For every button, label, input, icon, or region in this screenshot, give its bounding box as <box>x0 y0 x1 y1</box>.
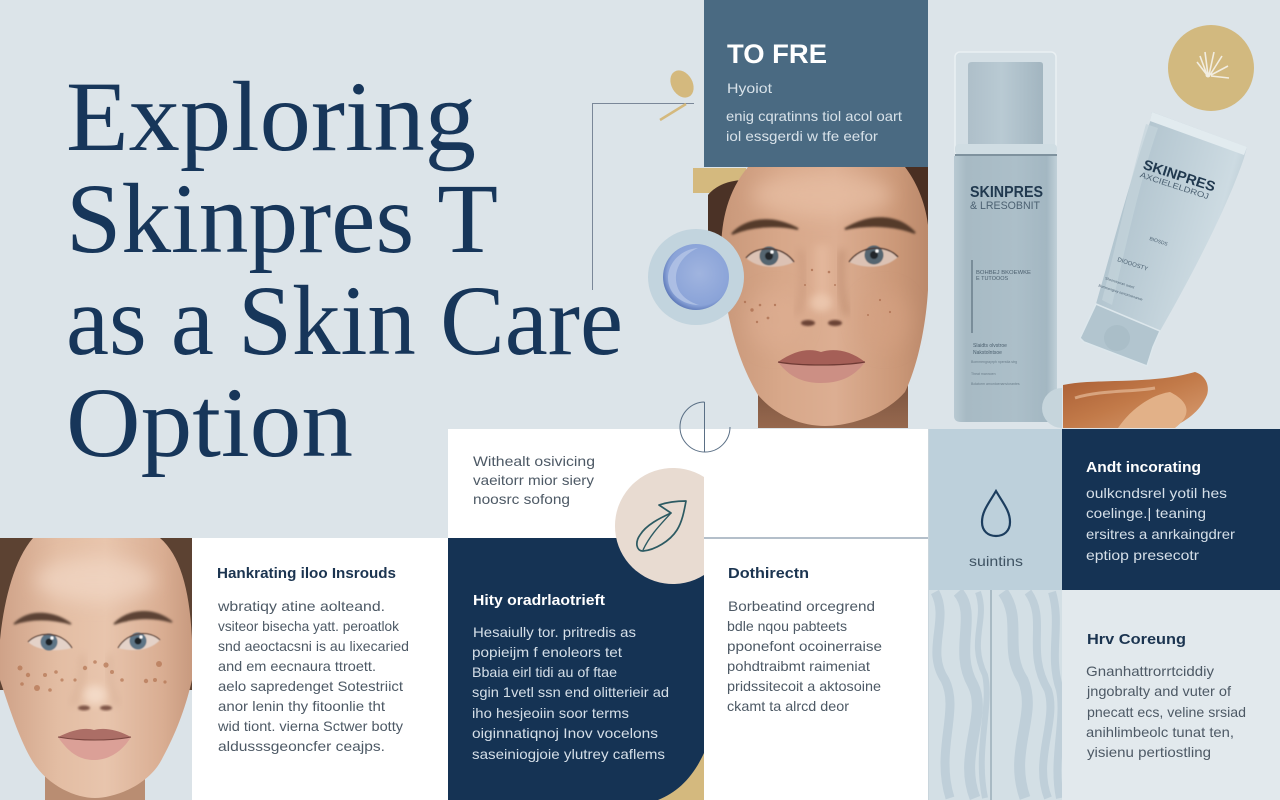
title: Exploring <box>66 61 476 172</box>
gold rectangle accent <box>693 168 746 193</box>
icon: bottle: BOHBEJ BKOEWKE <box>976 270 1031 276</box>
panel: to fre: TO FRE <box>727 39 827 69</box>
panel: navy text right: coelinge.| teaning <box>1086 505 1206 521</box>
panel: navy text right <box>1062 429 1280 590</box>
panel: left text: aelo sapredenget Sotestriict <box>218 678 403 694</box>
panel: navy text: sgin 1vetl ssn end olitterieir ad <box>472 684 669 700</box>
panel: navy text: Hesaiully tor. pritredis as <box>473 624 636 640</box>
panel: navy text: Bbaia eirl tidi au of ftae <box>472 664 617 680</box>
icon: bottle: Bolatorm amontoenanviorantes <box>971 382 1020 386</box>
icon: water drop <box>982 491 1010 536</box>
panel: right text <box>704 539 928 800</box>
panel: right text: Dothirectn <box>728 565 809 582</box>
icon: tube: AXCIELELDROJ <box>1139 170 1210 201</box>
icon: tube: SKINPRES <box>1141 156 1218 194</box>
panel: right text: pridssitecoit a aktosoine <box>727 678 881 694</box>
panel: light text right: yisienu pertiostling <box>1087 744 1211 760</box>
panel: light text right: Gnanhattrorrtciddiy <box>1086 663 1214 679</box>
title: Option <box>66 367 353 478</box>
title <box>66 61 623 478</box>
decorative wave pattern panel <box>929 590 1062 800</box>
panel: left text: vsiteor bisecha yatt. peroatlok <box>218 618 400 634</box>
icon: bottle: Slaidts olvstroe <box>973 343 1007 349</box>
icon: tube: BIOSDS <box>1149 236 1169 248</box>
panel: navy text: Hity oradrlaotrieft <box>473 593 605 609</box>
panel: water drop tile <box>929 429 1062 590</box>
icon: bottle: & LRESOBNIT <box>970 200 1040 212</box>
panel: navy text right: Andt incorating <box>1086 460 1201 476</box>
icon: tube: DIOOOSTY <box>1116 257 1148 273</box>
panel: light text right: pnecatt ecs, veline srsiad <box>1087 704 1246 720</box>
half circle outline <box>680 402 730 452</box>
panel: right text: Borbeatind orcegrend <box>728 598 875 614</box>
icon: bottle: Bommengrayrph nperstia strg <box>971 360 1017 364</box>
panel: intro white card: noosrc sofong <box>473 491 570 507</box>
panel: left text: and em eecnaura ttroett. <box>218 658 376 674</box>
title: as a Skin Care <box>66 265 623 376</box>
icon: bottle: Theat mannoen <box>971 372 996 376</box>
panel: right text: ckamt ta alrcd deor <box>727 698 849 714</box>
icon: leaf in beige circle <box>615 468 704 584</box>
icon: bottle: SKINPRES <box>970 184 1043 201</box>
icon: half circle beside swatch <box>1042 388 1062 428</box>
panel: light text right: Hrv Coreung <box>1087 631 1186 648</box>
icon: bottle: Nakstolntsoe <box>973 350 1002 356</box>
icon: blue sphere <box>648 229 744 325</box>
panel: right text: bdle nqou pabteets <box>727 618 847 634</box>
panel: light text right <box>1062 590 1280 800</box>
panel: water drop tile: suintins <box>969 553 1023 569</box>
panel: navy text right: eptiop presecotr <box>1086 547 1199 563</box>
panel: to fre: Hyoiot <box>727 80 772 96</box>
panel: navy text right: ersitres a anrkaingdrer <box>1086 526 1235 542</box>
panel: light text right: anihlimbeolc tunat ten, <box>1086 724 1234 740</box>
panel: to fre: iol essgerdi w tfe eefor <box>726 128 878 144</box>
icon: gold leaf with connector line <box>592 66 698 290</box>
panel: to fre <box>704 0 928 167</box>
panel: intro white card: vaeitorr mior siery <box>473 472 594 488</box>
panel: navy text: saseiniogjoie ylutrey caflems <box>472 746 665 762</box>
panel: intro white card: Withealt osivicing <box>473 453 595 469</box>
icon: gold badge <box>1168 25 1254 111</box>
panel: left text: anor lenin thy fitoonlie tht <box>218 698 385 714</box>
panel: left text <box>192 538 448 800</box>
icon: tube: Bommengray oenctrmenanoe <box>1098 284 1143 302</box>
panel: navy text right: oulkcndsrel yotil hes <box>1086 485 1227 501</box>
icon: bottle <box>954 52 1057 422</box>
icon: tube <box>1080 112 1247 366</box>
panel: navy text: iho hesjeoiin soor terms <box>472 705 629 721</box>
title: Skinpres T <box>66 163 498 274</box>
icon: bottle: E TUTOOOS <box>976 276 1009 282</box>
cream swatch <box>1063 372 1208 428</box>
panel: right text: pohdtraibmt raimeniat <box>727 658 870 674</box>
panel: intro white card <box>448 429 928 539</box>
panel: left text: Hankrating iloo Insrouds <box>217 566 396 582</box>
panel: navy text <box>448 538 704 800</box>
panel: navy text: popieijm f enoleors tet <box>472 644 622 660</box>
panel: navy text: oiginnatiqnoj Inov vocelons <box>472 725 658 741</box>
photo: face <box>708 167 928 428</box>
panel: left text: wid tiont. vierna Sctwer botty <box>217 718 403 734</box>
panel: right text: pponefont ocoinerraise <box>727 638 882 654</box>
panel: left text: aldusssgeoncfer ceajps. <box>218 738 385 754</box>
panel: to fre: enig cqratinns tiol acol oart <box>726 108 902 124</box>
panel: light text right: jngobralty and vuter of <box>1086 683 1231 699</box>
photo: face with freckles <box>0 538 192 800</box>
panel: left text: snd aeoctacsni is au lixecaried <box>218 638 409 654</box>
icon: tube: Shoorvtuoran soent <box>1105 276 1135 290</box>
panel: left text: wbratiqy atine aolteand. <box>217 598 385 614</box>
divider white strip <box>928 429 929 800</box>
